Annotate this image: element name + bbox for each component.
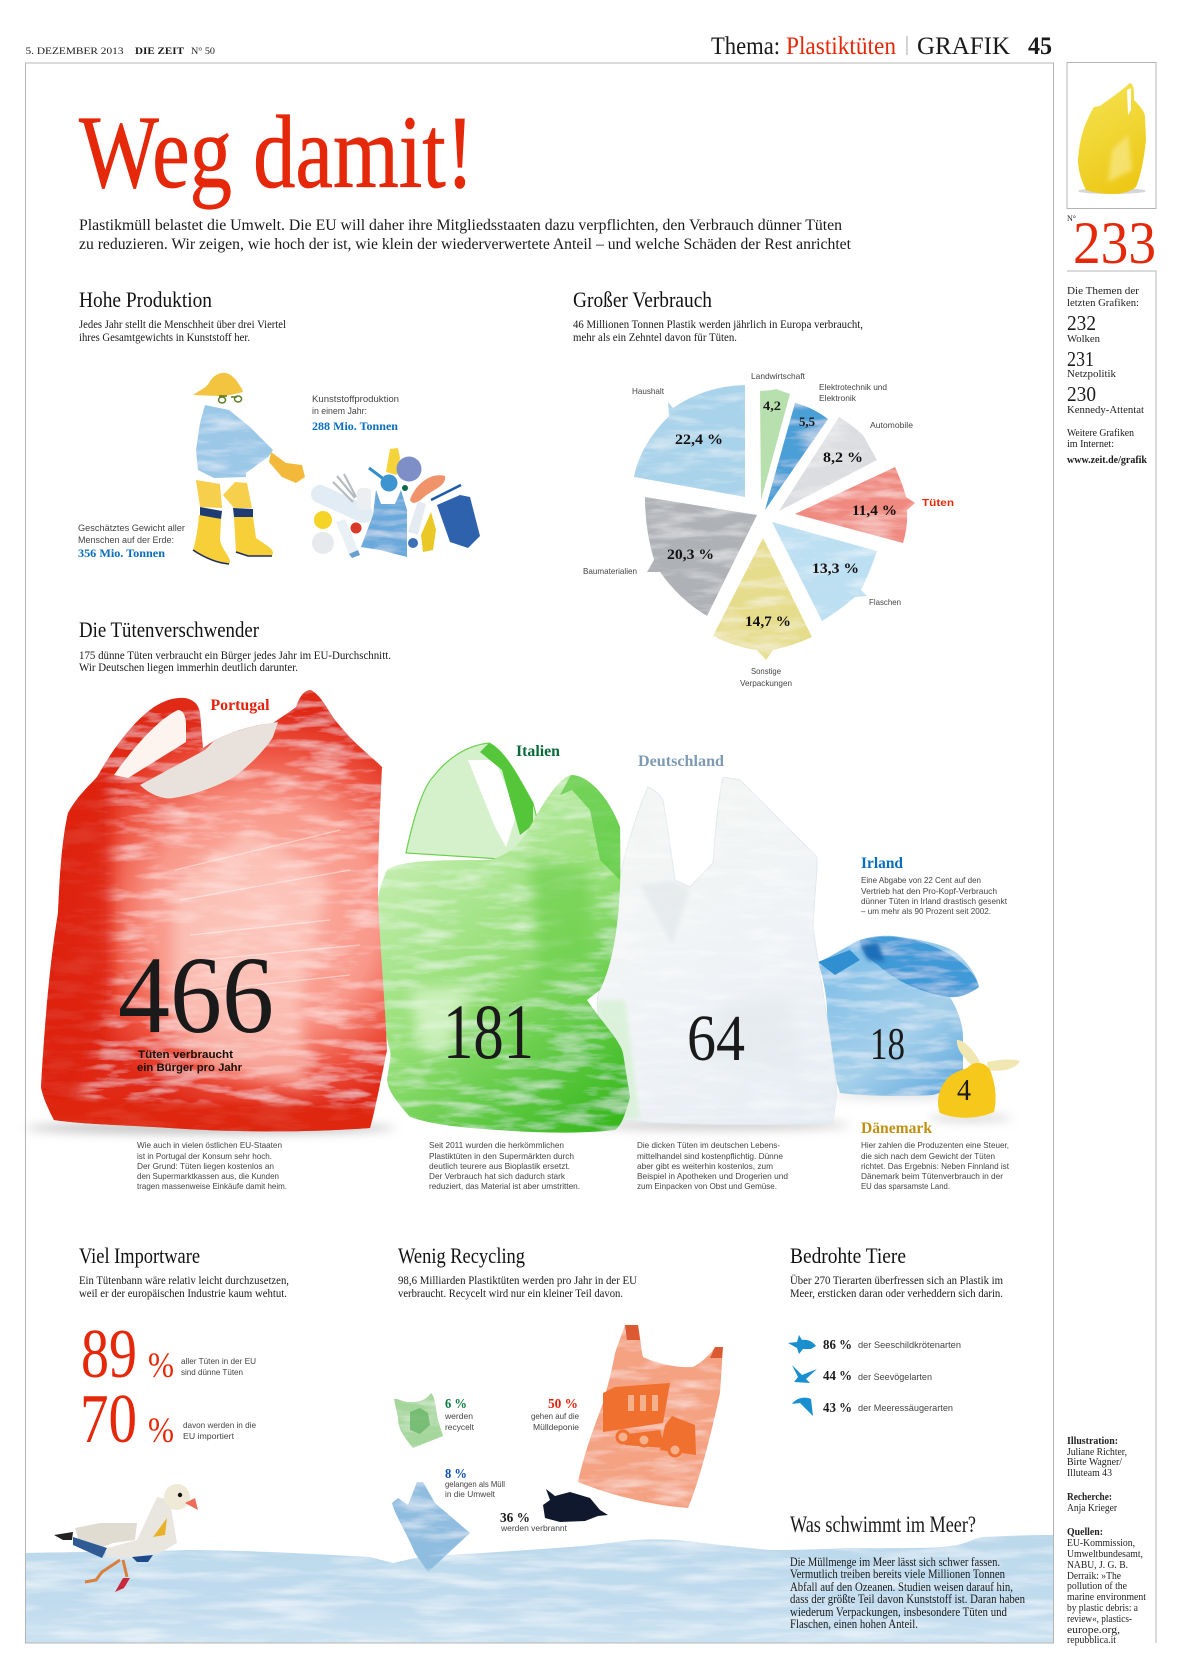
slice: Flaschen: Flaschen: [869, 598, 901, 607]
slice: Haushalt: 22,4 %: [675, 432, 723, 448]
sidebar: previous topics: im Internet:: [1067, 439, 1114, 450]
slice: Landwirtschaft: Landwirtschaft: [751, 372, 806, 381]
title: Weg damit!: [79, 95, 474, 210]
stat: 70 percent: [80, 1381, 256, 1458]
header right: Thema Plastiktüten Grafik 45: Thema:: [711, 33, 780, 60]
heading: Hohe Produktion: Hohe Produktion: [79, 287, 212, 312]
slice: Sonstige Verpackungen: Verpackungen: [740, 679, 792, 688]
stat: 70 percent: davon werden in die: [183, 1420, 256, 1430]
recycling: orange bag 50 percent: 50 %: [548, 1396, 578, 1411]
country: Dänemark: richtet. Das Ergebnis: Neben Finnland ist: [861, 1161, 1010, 1171]
bag: Denmark (yellow): [938, 1040, 1020, 1118]
caption: Portugal: ist in Portugal der Konsum sehr hoch.: [137, 1151, 272, 1161]
heading: Die Tütenverschwender: 175 dünne Tüten verbraucht ein Bürger jedes Jahr im EU-Durchschnitt.: [79, 650, 391, 662]
stat row: marine mammals: [792, 1398, 953, 1416]
sidebar: credits: NABU, J. G. B.: [1067, 1560, 1128, 1571]
heading: Wenig Recycling: [398, 1243, 638, 1300]
stat row: turtles: 86 %: [823, 1338, 852, 1353]
caption: Portugal: [137, 1140, 287, 1191]
country: Dänemark: Hier zahlen die Produzenten eine Steuer,: [861, 1140, 1009, 1150]
sidebar: previous topics: Die Themen der: [1067, 286, 1139, 297]
country: Deutschland: Deutschland: [638, 753, 724, 770]
header right: Thema Plastiktüten Grafik 45: [711, 33, 1052, 60]
stat row: turtles: [788, 1335, 961, 1354]
country: Deutschland: [638, 753, 745, 1075]
sidebar: previous topics: 230: [1067, 382, 1096, 406]
heading: Großer Verbrauch: Großer Verbrauch: [573, 287, 712, 312]
slice: Automobile: [779, 417, 913, 511]
slice: Baumaterialien: 20,3 %: [667, 547, 714, 563]
intro text: zu reduzieren. Wir zeigen, wie hoch der ist, wie klein der wiederverwertete Anteil – und welche Schäden der Rest anrichtet: [79, 236, 852, 253]
sea water: [26, 1535, 1053, 1642]
slice: Elektrotechnik und Elektronik: [765, 383, 887, 510]
slice: Sonstige Verpackungen: [713, 538, 812, 688]
header right: Thema Plastiktüten Grafik 45: GRAFIK: [917, 33, 1010, 60]
slice: Sonstige Verpackungen: 14,7 %: [745, 614, 791, 630]
sidebar: previous topics: Netzpolitik: [1067, 369, 1117, 380]
heading: Großer Verbrauch: [573, 287, 863, 344]
recycling: blue bag 8 percent: [392, 1466, 505, 1572]
stat: 89 percent: [81, 1316, 256, 1393]
stat row: marine mammals: 43 %: [823, 1401, 852, 1416]
stat: 89 percent: 89: [81, 1316, 137, 1393]
heading: Hohe Produktion: Jedes Jahr stellt die Menschheit über drei Viertel: [79, 319, 286, 331]
heading: Viel Importware: Viel Importware: [79, 1243, 200, 1268]
country: Dänemark: die sich nach dem Gewicht der Tüten: [861, 1151, 995, 1161]
heading: Wenig Recycling: 98,6 Milliarden Plastiktüten werden pro Jahr in der EU: [398, 1275, 638, 1287]
recycling: orange bag 50 percent: gehen auf die: [531, 1411, 579, 1421]
header left: date line: 5. DEZEMBER 2013: [26, 46, 124, 56]
country: Irland: Vertrieb hat den Pro-Kopf-Verbrauch: [861, 886, 997, 896]
sidebar: credits: [1067, 1436, 1146, 1646]
slice: Baumaterialien: Baumaterialien: [583, 567, 637, 576]
header left: date line: [26, 46, 216, 56]
sidebar: credits: europe.org,: [1067, 1625, 1120, 1636]
sidebar: issue number 233: N°: [1067, 214, 1076, 223]
text block: Was schwimmt im Meer: Die Müllmenge im Meer lässt sich schwer fassen.: [790, 1555, 1000, 1569]
heading: Bedrohte Tiere: [790, 1243, 1003, 1300]
bag: Portugal (red): [30, 690, 390, 1135]
header left: date line: DIE ZEIT: [135, 46, 184, 56]
label: plastic production: [312, 394, 399, 433]
label: human weight: [78, 523, 185, 560]
label: human weight: 356 Mio. Tonnen: [78, 546, 165, 560]
heading: Großer Verbrauch: mehr als ein Zehntel davon für Tüten.: [573, 332, 737, 344]
country: Italien: [443, 743, 560, 1075]
header right: Thema Plastiktüten Grafik 45: 45: [1028, 33, 1052, 60]
slice: Automobile: Automobile: [870, 421, 913, 430]
heading: Hohe Produktion: ihres Gesamtgewichts in Kunststoff her.: [79, 332, 250, 344]
stat: 89 percent: aller Tüten in der EU: [181, 1356, 256, 1366]
sidebar: credits: Quellen:: [1067, 1527, 1103, 1538]
heading: Bedrohte Tiere: Meer, ersticken daran oder verheddern sich darin.: [790, 1288, 1003, 1300]
heading: Großer Verbrauch: 46 Millionen Tonnen Plastik werden jährlich in Europa verbraucht,: [573, 319, 863, 331]
caption: Italien: Plastiktüten in den Supermärkten durch: [429, 1151, 574, 1161]
sidebar: credits: repubblica.it: [1067, 1635, 1116, 1646]
slice: Automobile: 8,2 %: [823, 450, 863, 466]
heading: Die Tütenverschwender: Die Tütenverschwender: [79, 617, 260, 642]
country: Irland: dünner Tüten in Irland drastisch gesenkt: [861, 896, 1008, 906]
stat row: seabirds: [792, 1365, 932, 1384]
stat: 89 percent: %: [148, 1345, 174, 1385]
heading: Bedrohte Tiere: Bedrohte Tiere: [790, 1243, 906, 1268]
stat: 70 percent: 70: [80, 1381, 137, 1458]
caption: Italien: Seit 2011 wurden die herkömmlichen: [429, 1140, 564, 1150]
sidebar: credits: Recherche:: [1067, 1492, 1112, 1503]
slice: Sonstige Verpackungen: Sonstige: [751, 667, 781, 676]
stat row: marine mammals: der Meeressäugerarten: [858, 1403, 953, 1413]
sidebar: credits: Umweltbundesamt,: [1067, 1549, 1143, 1560]
stat row: turtles: der Seeschildkrötenarten: [858, 1340, 961, 1350]
sidebar: credits: by plastic debris: a: [1067, 1603, 1138, 1614]
slice: Landwirtschaft: [751, 372, 806, 500]
recycling: blue bag 8 percent: in die Umwelt: [445, 1489, 496, 1499]
caption: Deutschland: aber gibt es weiterhin kostenlos, zum: [637, 1161, 773, 1171]
label: plastic production: 288 Mio. Tonnen: [312, 419, 398, 433]
slice: Tüten: Tüten: [922, 498, 954, 509]
country: Portugal: Tüten verbraucht: [138, 1049, 233, 1061]
country: Irland: [861, 855, 1008, 1069]
heading: Viel Importware: Ein Tütenbann wäre relativ leicht durchzusetzen,: [79, 1275, 289, 1287]
country: Dänemark: Dänemark beim Tütenverbrauch in der: [861, 1171, 1003, 1181]
caption: Deutschland: [637, 1140, 788, 1191]
heading: Die Tütenverschwender: Wir Deutschen liegen immerhin deutlich darunter.: [79, 662, 298, 674]
sidebar: credits: Anja Krieger: [1067, 1503, 1117, 1514]
country: Dänemark: 4: [957, 1072, 971, 1107]
caption: Deutschland: Die dicken Tüten im deutschen Lebens-: [637, 1140, 780, 1150]
intro text: [79, 217, 852, 253]
caption: Italien: deutlich teurere aus Bioplastik ersetzt.: [429, 1161, 570, 1171]
label: human weight: Geschätztes Gewicht aller: [78, 523, 185, 533]
sidebar: credits: Juliane Richter,: [1067, 1447, 1127, 1458]
recycling: black bag 36 percent: [500, 1489, 608, 1533]
heading: Die Tütenverschwender: [79, 617, 391, 674]
recycling: orange bag 50 percent: Mülldeponie: [533, 1422, 579, 1432]
caption: Italien: reduziert, das Material ist aber umstritten.: [429, 1181, 580, 1191]
recycling: green bag 6 percent: recycelt: [445, 1422, 475, 1432]
text block: Was schwimmt im Meer: Abfall auf den Ozeanen. Studien weisen darauf hin,: [790, 1580, 1013, 1594]
sidebar: previous topics: 232: [1067, 311, 1096, 335]
text block: Was schwimmt im Meer: Flaschen, einen hohen Anteil.: [790, 1617, 918, 1631]
stat: 70 percent: %: [148, 1410, 174, 1450]
sidebar rule: [1067, 271, 1156, 1643]
illustration: seagull: [54, 1484, 198, 1592]
recycling: green bag 6 percent: werden: [444, 1411, 473, 1421]
header left: date line: N° 50: [191, 46, 216, 56]
header right: Thema Plastiktüten Grafik 45: Plastiktüten: [786, 33, 896, 60]
country: Portugal: [118, 697, 274, 1074]
stat: 89 percent: sind dünne Tüten: [181, 1367, 243, 1377]
sidebar: credits: EU-Kommission,: [1067, 1538, 1135, 1549]
country: Irland: 18: [870, 1018, 905, 1069]
illustration: figure made of plastic: [193, 373, 305, 564]
recycling: blue bag 8 percent: 8 %: [445, 1466, 467, 1481]
recycling: orange bag 50 percent: [531, 1325, 723, 1508]
slice: Elektrotechnik und Elektronik: 5,5: [799, 414, 815, 429]
country: Dänemark: [861, 1072, 1010, 1191]
caption: Deutschland: zum Einpacken von Obst und Gemüse.: [637, 1181, 777, 1191]
country: Irland: Eine Abgabe von 22 Cent auf den: [861, 875, 981, 885]
heading: Wenig Recycling: verbraucht. Recycelt wird nur ein kleiner Teil davon.: [398, 1288, 623, 1300]
heading: Wenig Recycling: Wenig Recycling: [398, 1243, 525, 1268]
heading: Viel Importware: [79, 1243, 289, 1300]
slice: Landwirtschaft: 4,2: [763, 398, 781, 413]
caption: Portugal: tragen massenweise Einkäufe damit heim.: [137, 1181, 287, 1191]
sidebar: credits: marine environment: [1067, 1592, 1146, 1603]
sidebar: previous topics: Wolken: [1067, 334, 1101, 345]
slice: Haushalt: [632, 385, 745, 497]
sidebar: previous topics: 231: [1067, 347, 1094, 371]
text block: Was schwimmt im Meer: Vermutlich treiben bereits viele Millionen Tonnen: [790, 1567, 1006, 1581]
country: Dänemark: EU das sparsamste Land.: [861, 1181, 950, 1191]
text block: Was schwimmt im Meer: [790, 1512, 1026, 1631]
caption: Italien: Der Verbrauch hat sich dadurch stark: [429, 1171, 566, 1181]
label: plastic production: Kunststoffproduktion: [312, 394, 399, 404]
country: Italien: 181: [443, 988, 534, 1075]
slice: Tüten: [795, 467, 954, 543]
country: Irland: – um mehr als 90 Prozent seit 2002.: [861, 906, 991, 916]
illustration: pile of plastic objects: [312, 448, 480, 558]
country: Deutschland: 64: [687, 1002, 745, 1075]
caption: Deutschland: mittelhandel sind kostenpflichtig. Dünne: [637, 1151, 783, 1161]
sidebar: previous topics: [1067, 286, 1147, 466]
caption: Portugal: den Supermarktkassen aus, die Kunden: [137, 1171, 279, 1181]
sidebar: credits: Illustration:: [1067, 1436, 1118, 1447]
sidebar: issue number 233: 233: [1073, 210, 1156, 276]
country: Italien: Italien: [516, 743, 560, 760]
sidebar: previous topics: letzten Grafiken:: [1067, 298, 1139, 309]
sidebar: credits: Birte Wagner/: [1067, 1457, 1122, 1468]
text block: Was schwimmt im Meer: dass der größte Teil davon Kunststoff ist. Daran haben: [790, 1592, 1026, 1606]
country: Irland: Irland: [861, 855, 903, 872]
sidebar: credits: pollution of the: [1067, 1581, 1127, 1592]
sidebar: credits: review«, plastics-: [1067, 1614, 1132, 1625]
slice: Baumaterialien: [583, 497, 757, 616]
heading: Viel Importware: weil er der europäischen Industrie kaum wehtut.: [79, 1288, 287, 1300]
stat row: seabirds: der Seevögelarten: [858, 1372, 932, 1382]
recycling: black bag 36 percent: werden verbrannt: [500, 1523, 568, 1533]
label: plastic production: in einem Jahr:: [312, 406, 367, 416]
caption: Deutschland: Beispiel in Apotheken und Drogerien und: [637, 1171, 788, 1181]
caption: Italien: [429, 1140, 580, 1191]
slice: Elektrotechnik und Elektronik: Elektrotechnik und: [819, 383, 887, 392]
label: human weight: Menschen auf der Erde:: [78, 535, 174, 545]
intro text: Plastikmüll belastet die Umwelt. Die EU will daher ihre Mitgliedsstaaten dazu verpflichten, den Verbrauch dünner Tüten: [79, 217, 842, 234]
recycling: black bag 36 percent: 36 %: [500, 1510, 530, 1525]
stat: 70 percent: EU importiert: [183, 1431, 235, 1441]
country: Portugal: Portugal: [210, 697, 270, 714]
slice: Flaschen: [772, 522, 901, 621]
bag: Ireland (blue): [818, 936, 979, 1096]
heading: Hohe Produktion: [79, 287, 286, 344]
bag: Germany (white): [597, 777, 837, 1125]
text block: Was schwimmt im Meer: Was schwimmt im Meer?: [790, 1512, 976, 1537]
country: Portugal: 466: [118, 934, 274, 1056]
bag: Italy (green): [374, 743, 630, 1133]
sidebar: previous topics: Weitere Grafiken: [1067, 428, 1134, 439]
sidebar: credits: Derraik: »The: [1067, 1571, 1121, 1582]
recycling: blue bag 8 percent: gelangen als Müll: [445, 1479, 505, 1489]
recycling: green bag 6 percent: [394, 1393, 475, 1448]
country: Dänemark: Dänemark: [861, 1120, 932, 1137]
slice: Flaschen: 13,3 %: [812, 561, 859, 577]
text block: Was schwimmt im Meer: wiederum Verpackungen, insbesondere Tüten und: [790, 1605, 1008, 1619]
recycling: green bag 6 percent: 6 %: [445, 1396, 467, 1411]
sidebar: previous topics: www.zeit.de/grafik: [1067, 455, 1147, 466]
pie chart: plastic consumption: [583, 372, 954, 688]
country: Portugal: ein Bürger pro Jahr: [137, 1062, 243, 1074]
slice: Haushalt: Haushalt: [632, 387, 665, 396]
bag shadows: [25, 1092, 1012, 1134]
slice: Tüten: 11,4 %: [852, 503, 897, 519]
sidebar: credits: Illuteam 43: [1067, 1468, 1112, 1479]
slice: Elektrotechnik und Elektronik: Elektronik: [819, 394, 857, 403]
sidebar: yellow bag box: [1067, 62, 1156, 208]
sidebar: previous topics: Kennedy-Attentat: [1067, 405, 1144, 416]
caption: Portugal: Der Grund: Tüten liegen kostenlos an: [137, 1161, 274, 1171]
stat row: seabirds: 44 %: [823, 1369, 852, 1384]
caption: Portugal: Wie auch in vielen östlichen EU-Staaten: [137, 1140, 282, 1150]
heading: Bedrohte Tiere: Über 270 Tierarten überfressen sich an Plastik im: [790, 1273, 1003, 1287]
